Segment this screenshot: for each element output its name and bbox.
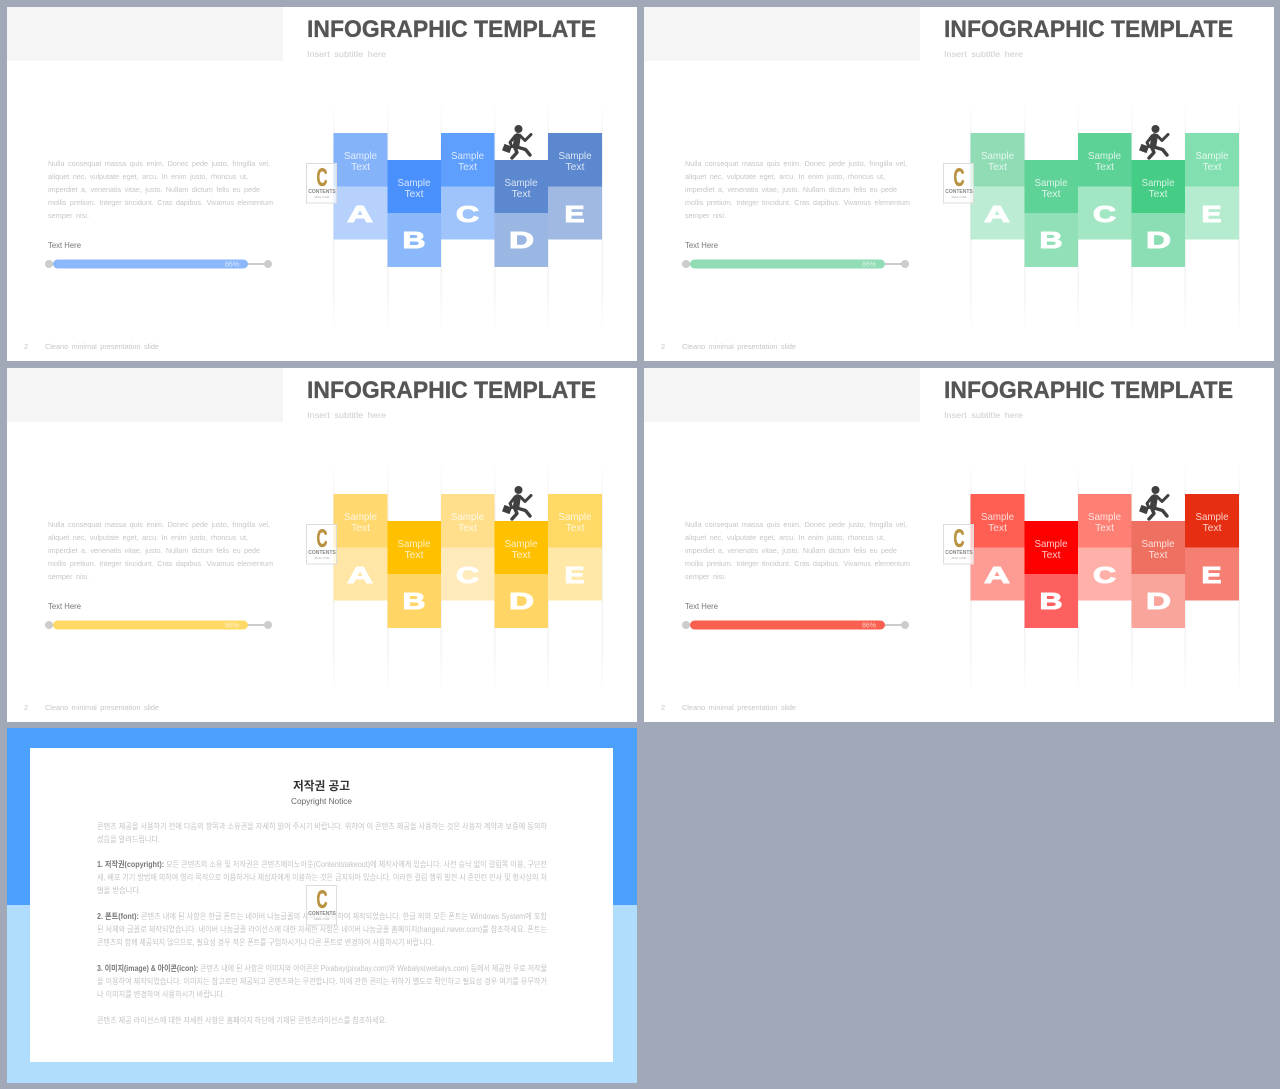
watermark logo: CONTENTS [308,911,336,917]
body text: mollis pretium. Integer tincidunt. Cras dapibus. Vivamus elementum [685,559,910,568]
step chart [334,133,602,267]
step D: D [509,588,534,614]
body text: aliquet nec, vulputate eget, arcu. In enim justo, rhoncus ut, [48,533,248,542]
icon: running businessman [1139,486,1168,519]
body text: Nulla consequat massa quis enim. Donec pede justo, fringilla vel, [685,520,907,529]
step C: Sample [451,511,484,523]
step A [334,133,388,240]
step D [494,521,548,628]
watermark logo: C [316,886,328,914]
body text: imperdiet a, venenatis vitae, justo. Nullam dictum felis eu pede [48,546,260,555]
notice body: 1. 저작권(copyright): 모든 콘텐츠의 소유 및 저작권은 콘텐츠메이노아웃(Contentstakeout)에 제작사에게 있습니다. 사전 승낙 없이 걸림쪽 이용, 구단전 [97,859,547,869]
step B [388,521,441,628]
subtitle: Insert subtitle here [307,410,386,420]
step D [1132,160,1185,267]
step D: D [509,227,534,253]
progress bar: 86% [225,622,239,630]
watermark logo: MAIL.COM [315,195,330,199]
notice subheading: Copyright Notice [291,796,352,806]
step B: Sample [398,177,431,189]
step E: Text [1202,522,1222,534]
notice body: 콘텐츠 제공 라이선스에 대한 자세한 사항은 홈페이지 하단에 기재된 콘텐츠라이선스를 참조하세요. [97,1015,387,1025]
watermark logo: MAIL.COM [315,917,330,921]
step C: C [456,201,479,227]
step A: Sample [344,511,377,523]
step C: C [456,562,479,588]
step E: Sample [1196,511,1229,523]
body text: imperdiet a, venenatis vitae, justo. Nullam dictum felis eu pede [48,185,260,194]
step A: A [984,201,1010,227]
footer: Cleano minimal presentation slide [682,703,796,712]
step B: Text [1042,188,1061,200]
step C: C [1093,562,1116,588]
progress bar [682,620,909,630]
step E: Text [566,522,585,534]
watermark logo: MAIL.COM [952,556,967,560]
panel: green slide [644,7,1274,361]
progress bar: 86% [862,622,876,630]
title: INFOGRAPHIC TEMPLATE [307,377,596,404]
step C [441,494,494,600]
step E: Sample [1196,150,1229,162]
step E [548,133,602,240]
notice body: 콘텐츠 제공을 사용하기 전에 다음의 항목과 소유권을 자세히 읽어 주시기 바랍니다. 위하여 이 콘텐츠 제공을 사용하는 것은 사용자 계약과 보증에 동의하 [97,821,548,831]
step A: A [984,562,1010,588]
body text [48,159,273,220]
panel: yellow slide [7,368,637,722]
step E: Sample [558,150,592,162]
panel: blue slide [7,7,637,361]
watermark logo: C [316,164,328,192]
step D: Text [512,549,531,561]
body text: aliquet nec, vulputate eget, arcu. In enim justo, rhoncus ut, [685,172,885,181]
panel: copyright notice [7,728,637,1083]
step D: D [1146,588,1171,614]
step B: B [1040,588,1062,614]
body text: mollis pretium. Integer tincidunt. Cras dapibus. Vivamus elementum [685,198,910,207]
notice body: 콘텐츠의 함께 제공되지 않으므로, 필요성 경우 적은 폰트를 구입하시거나 다른 폰트로 변경하여 사용하시기 바랍니다. [97,937,434,947]
notice heading: 저작권 공고 [293,778,350,793]
step B: B [402,227,426,253]
footer: 2 [661,703,665,712]
step A: A [347,562,373,588]
notice body: 벌을 받습니다. [97,885,141,895]
step E: E [1202,201,1222,227]
body text [685,159,910,220]
body text: semper nisi. [685,572,726,581]
step B: Sample [1034,177,1068,189]
step E: E [564,562,584,588]
step D: Sample [504,538,538,550]
notice body: 세, 배포 기기 방법에 의하여 영리 목적으로 이용하거나 제삼자에게 이용하는 것은 금지되어 있습니다. 이러한 걸림 행위 발전 시 준민런 민사 및 형사상의 처 [97,872,547,882]
step E: E [1202,562,1222,588]
icon: running businessman [502,125,531,158]
body text: aliquet nec, vulputate eget, arcu. In enim justo, rhoncus ut, [48,172,248,181]
step C: Text [1095,161,1114,173]
footer: Cleano minimal presentation slide [45,703,159,712]
step B: Text [404,188,424,200]
step E: E [564,201,584,227]
step A [970,133,1024,240]
step D: Sample [1142,538,1175,550]
step A: Text [988,522,1007,534]
step chart [970,494,1239,628]
step B: Text [1042,549,1061,561]
watermark logo [944,164,974,203]
watermark logo: MAIL.COM [952,195,967,199]
step E [548,494,602,600]
step D: Text [512,188,531,200]
step C: Sample [1088,150,1121,162]
watermark logo [306,886,336,925]
step C [441,133,494,240]
step B [1024,521,1078,628]
step A [970,494,1024,600]
notice body: 셨음을 알려드립니다. [97,834,160,844]
body text: imperdiet a, venenatis vitae, justo. Nullam dictum felis eu pede [685,185,897,194]
step A: Sample [981,150,1014,162]
step B: Sample [1034,538,1068,550]
watermark logo: C [954,525,964,553]
watermark logo: CONTENTS [308,189,336,195]
progress label: Text Here [685,241,719,250]
step E: Text [566,161,585,173]
title: INFOGRAPHIC TEMPLATE [307,16,596,43]
step A [334,494,388,600]
footer: Cleano minimal presentation slide [45,342,159,351]
body text [48,520,273,581]
watermark logo [306,524,336,564]
panel: red slide [644,368,1274,722]
body text: Nulla consequat massa quis enim. Donec pede justo, fringilla vel, [685,159,907,168]
progress label: Text Here [685,602,719,611]
progress bar: 86% [225,262,239,268]
body text: semper nisi. [48,211,89,220]
step B: Sample [398,538,431,550]
step B: B [1040,227,1062,253]
notice body: 3. 이미지(image) & 아이콘(icon): 콘텐츠 내에 된 사항은 이미지와 아이콘은 Pixabay(pixabay.com)와 Webalys(webalys.com) 등에서 제공한 무료 저작물 [97,963,547,973]
step A: A [347,201,373,227]
body text: mollis pretium. Integer tincidunt. Cras dapibus. Vivamus elementum [48,198,273,207]
notice body [97,821,548,1025]
step C: Text [458,522,477,534]
notice body: 2. 폰트(font): 콘텐츠 내에 된 사항은 한글 폰트는 네이버 나눔글꼴의 서체를 사용하여 제작되었습니다. 한글 외의 모든 폰트는 Windows System에 포함 [97,911,548,921]
step C: C [1093,201,1116,227]
body text: aliquet nec, vulputate eget, arcu. In enim justo, rhoncus ut, [685,533,885,542]
step D: Sample [504,177,538,189]
footer: 2 [661,342,665,351]
step A: Sample [981,511,1014,523]
step C: Sample [1088,511,1121,523]
title: INFOGRAPHIC TEMPLATE [944,377,1233,404]
title: INFOGRAPHIC TEMPLATE [944,16,1233,43]
icon: running businessman [502,486,531,519]
watermark logo: CONTENTS [945,550,973,556]
step B [1024,160,1078,267]
subtitle: Insert subtitle here [307,49,386,59]
step E: Sample [558,511,592,523]
footer: Cleano minimal presentation slide [682,342,796,351]
step E [1185,494,1239,600]
step E: Text [1202,161,1222,173]
watermark logo: C [316,525,328,553]
watermark logo [944,524,974,564]
step A: Text [351,161,370,173]
progress label: Text Here [48,602,82,611]
step D [1132,521,1185,628]
icon: running businessman [1139,125,1168,158]
subtitle: Insert subtitle here [944,49,1023,59]
watermark logo: CONTENTS [945,189,973,195]
step C: Text [458,161,477,173]
step C: Text [1095,522,1114,534]
progress bar [682,260,909,268]
step C [1078,494,1132,600]
step C [1078,133,1132,240]
step A: Text [351,522,370,534]
notice body: 된 서체와 글꼴로 제작되었습니다. 네이버 나눔글꼴 라이선스에 대한 자세한 사항은 네이버 나눔글꼴 홈페이지(hangeul.naver.com)를 참조하세요. 폰트는 [97,924,547,934]
progress bar: 86% [862,262,876,268]
body text: imperdiet a, venenatis vitae, justo. Nullam dictum felis eu pede [685,546,897,555]
progress label: Text Here [48,241,82,250]
notice body: 을 이용하여 제작되었습니다. 이미지는 참고로만 제공되고 콘텐츠와는 무관합니다. 이에 관한 권리는 위하기 별도로 확인하고 필요성 경우 여기를 유무하거 [97,976,547,986]
progress bar [45,260,272,268]
step D: Text [1148,188,1168,200]
step B: Text [404,549,424,561]
step chart [334,494,602,628]
progress bar [45,620,272,630]
footer: 2 [24,342,28,351]
watermark logo: MAIL.COM [315,556,330,560]
body text: semper nisi. [685,211,726,220]
subtitle: Insert subtitle here [944,410,1023,420]
step D: Sample [1142,177,1175,189]
watermark logo: C [954,164,964,192]
body text: mollis pretium. Integer tincidunt. Cras dapibus. Vivamus elementum [48,559,273,568]
watermark logo [306,164,336,203]
step B [388,160,441,267]
body text: semper nisi. [48,572,89,581]
step E [1185,133,1239,240]
step D: D [1146,227,1171,253]
step B: B [402,588,426,614]
step D [494,160,548,267]
notice body: 나 이미지를 변경하여 사용하시기 바랍니다. [97,989,225,999]
body text: Nulla consequat massa quis enim. Donec pede justo, fringilla vel, [48,159,270,168]
step D: Text [1148,549,1168,561]
step A: Sample [344,150,377,162]
footer: 2 [24,703,28,712]
step A: Text [988,161,1007,173]
body text [685,520,910,581]
body text: Nulla consequat massa quis enim. Donec pede justo, fringilla vel, [48,520,270,529]
step chart [970,133,1239,267]
step C: Sample [451,150,484,162]
watermark logo: CONTENTS [308,550,336,556]
